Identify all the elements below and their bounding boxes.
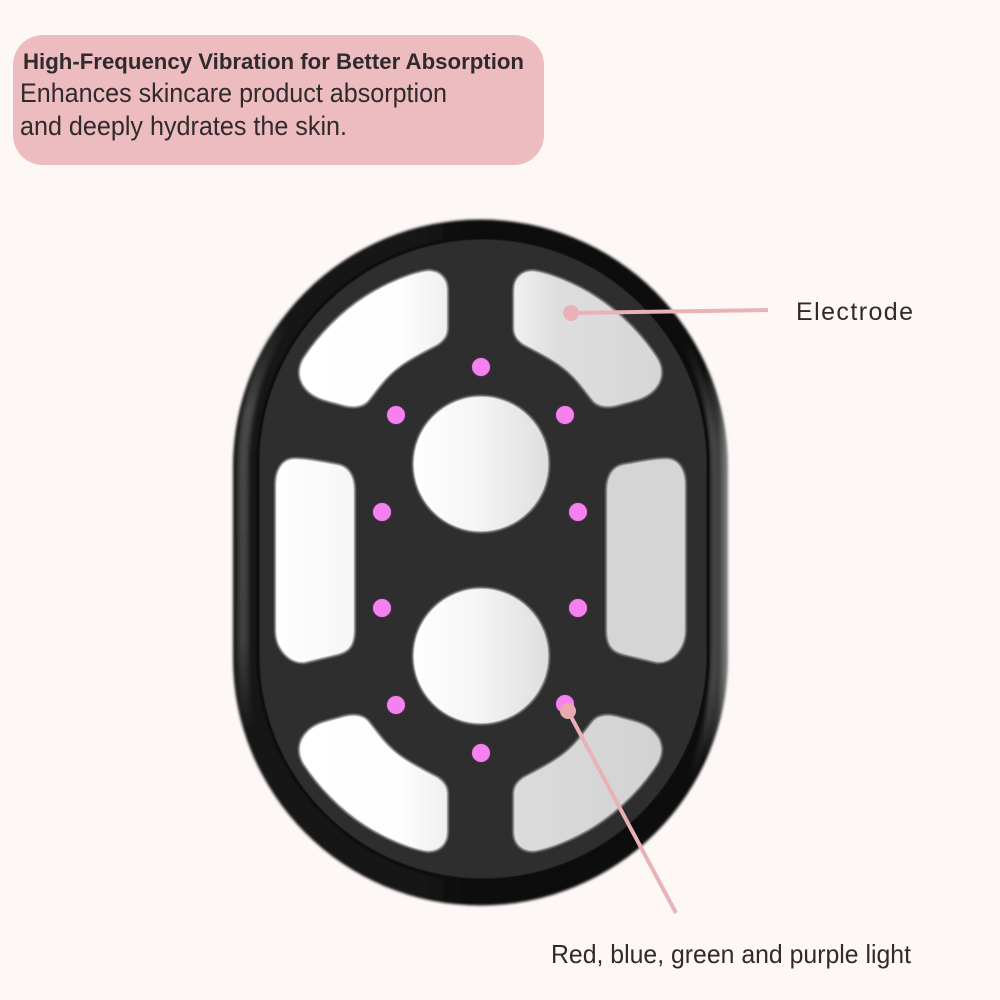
- heading: High-Frequency Vibration for Better Absorption: [23, 49, 524, 74]
- central electrode disc: upper: [412, 396, 550, 532]
- callout panel: headline and description: [13, 35, 544, 165]
- description text: and deeply hydrates the skin.: [20, 111, 347, 141]
- electrode: top left: [299, 270, 448, 407]
- electrode: bottom left: [299, 715, 448, 852]
- central electrode disc: lower: [412, 588, 550, 724]
- electrode: top right: [513, 270, 662, 407]
- label: light colours: Red, blue, green and purple light: [551, 939, 912, 969]
- LED light dots: [372, 358, 588, 762]
- label: electrode: Electrode: [796, 298, 913, 326]
- leader line: electrode: [563, 305, 768, 321]
- device: oval beauty instrument head: [233, 220, 728, 906]
- electrode: middle right: [606, 458, 686, 663]
- device inner face: [258, 238, 708, 880]
- electrode: middle left: [275, 458, 355, 663]
- leader line: light: [560, 703, 676, 913]
- rim highlight: left: [243, 325, 282, 730]
- electrode: bottom right: [513, 715, 662, 852]
- description text: [20, 78, 447, 141]
- device outer rim: [233, 220, 728, 906]
- description text: Enhances skincare product absorption: [20, 78, 447, 108]
- rim highlight: right: [685, 340, 715, 780]
